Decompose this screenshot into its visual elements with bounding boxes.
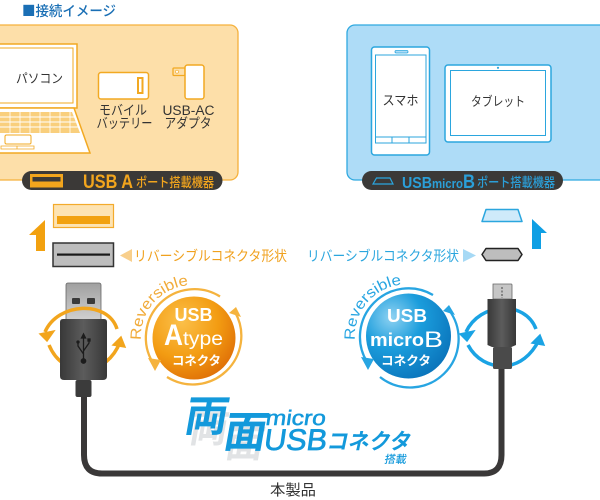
label: reversible connector shape right: リバーシブルコネクタ形状	[307, 248, 459, 264]
text: Reversible arc: Reversible	[344, 276, 400, 339]
banner: USB microB port devices: USB	[402, 175, 432, 192]
label: tablet: タブレット	[471, 94, 525, 109]
panel: USB microB devices	[347, 25, 600, 180]
banner: USB A port devices: ポート搭載機器	[136, 175, 214, 190]
title: double-sided microUSB connector: コネクタ	[325, 429, 414, 454]
title: double-sided microUSB connector: 搭載	[383, 452, 408, 466]
text: Reversible arc: Reversible	[130, 276, 188, 339]
icon: USB-AC adapter	[173, 65, 204, 99]
icon: USB A plug with rotation arrows	[40, 283, 125, 397]
heading: connection image: ■接続イメージ	[22, 1, 116, 21]
label: this product: 本製品	[270, 482, 316, 499]
icon: microB plug with rotation arrows	[460, 284, 544, 369]
icon: mobile battery	[98, 72, 148, 99]
icon: microB reversible plug shape	[482, 248, 522, 260]
label: reversible connector shape left: リバーシブルコネクタ形状	[134, 248, 287, 264]
label: smartphone: スマホ	[382, 93, 418, 108]
banner: USB microB port devices: ポート搭載機器	[477, 175, 555, 190]
badge: USB microB connector: コネクタ	[381, 354, 431, 368]
title: double-sided microUSB connector: 両	[186, 408, 232, 451]
banner: USB A port devices	[22, 171, 222, 193]
badge: USB A type connector	[130, 276, 242, 386]
title: double-sided microUSB connector: 面	[222, 423, 268, 466]
arrow: orange up	[29, 220, 45, 251]
banner: USB A port devices: USB A	[83, 172, 133, 193]
label: mobile battery: モバイル	[99, 103, 147, 118]
badge: USB microB connector	[344, 276, 460, 389]
badge: USB A type connector: コネクタ	[172, 354, 221, 368]
badge: USB A type connector: USB	[174, 304, 212, 325]
icon: laptop	[0, 44, 90, 153]
icon: smartphone	[372, 47, 430, 155]
badge: USB microB connector: micro	[370, 330, 424, 350]
cable	[84, 360, 502, 474]
icon: microB port socket	[482, 210, 522, 222]
label: USB-AC adapter: USB-AC	[162, 103, 215, 118]
badge: USB microB connector: B	[424, 327, 443, 352]
panel: USB A devices: アダプタ	[164, 116, 212, 131]
title: double-sided microUSB connector: micro	[264, 407, 328, 430]
banner: USB microB port devices: B	[463, 172, 475, 193]
title: double-sided microUSB connector	[181, 393, 414, 466]
arrow: blue up	[532, 219, 547, 249]
title: double-sided microUSB connector: 両	[181, 393, 233, 441]
badge: USB A type connector: A	[164, 319, 183, 352]
icon: USB A reversible plug shape	[53, 243, 114, 266]
panel: USB A devices: バッテリー	[96, 116, 152, 131]
badge: USB A type connector: type	[183, 329, 223, 350]
icon: USB A port socket	[54, 204, 114, 228]
banner: USB microB port devices	[362, 171, 563, 193]
badge: USB microB connector: USB	[387, 305, 427, 326]
title: double-sided microUSB connector: 面	[220, 409, 272, 457]
banner: USB microB port devices: micro	[432, 176, 463, 191]
panel: USB A devices	[0, 25, 238, 180]
icon: tablet	[445, 65, 551, 142]
title: double-sided microUSB connector: USB	[262, 424, 330, 457]
label: PC: パソコン	[16, 71, 63, 86]
